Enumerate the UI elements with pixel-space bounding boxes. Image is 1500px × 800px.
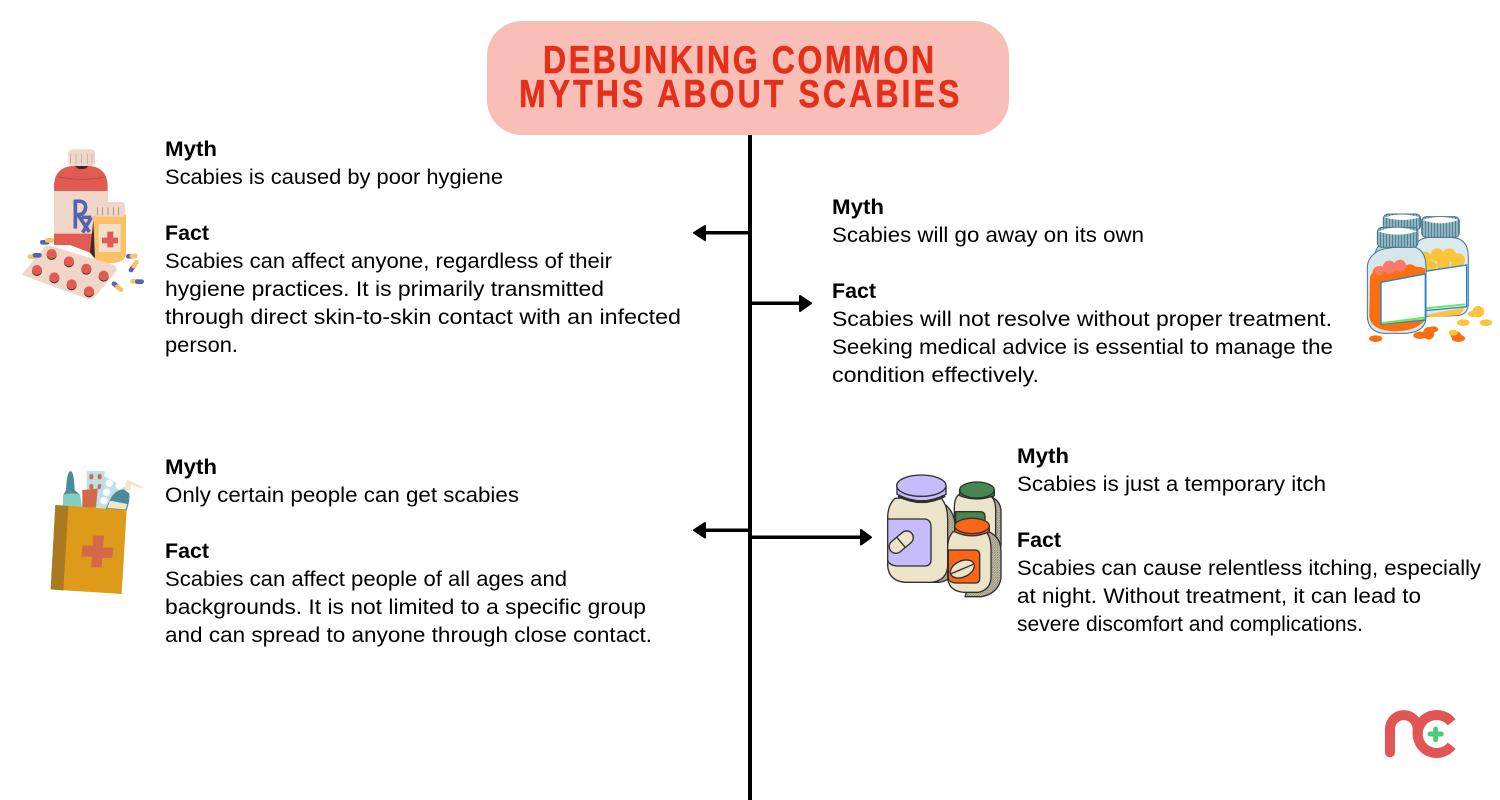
text block: go away on its own myth: Fact (832, 280, 876, 303)
text block: go away on its own myth: Scabies will not resolve without proper treatment. (832, 308, 1332, 331)
title banner (487, 21, 1009, 135)
text block: poor hygiene myth: Scabies is caused by poor hygiene (165, 166, 503, 189)
text block: certain people myth: Scabies can affect people of all ages and (165, 568, 567, 591)
text block: poor hygiene myth: Fact (165, 222, 209, 245)
text block: poor hygiene myth (165, 138, 681, 357)
text block: certain people myth: Fact (165, 540, 209, 563)
title banner: DEBUNKING COMMON (543, 38, 934, 82)
logo: NC medical mark (1390, 715, 1452, 753)
text block: temporary itch myth: at night. Without treatment, it can lead to (1017, 585, 1421, 608)
text block: certain people myth: backgrounds. It is not limited to a specific group (165, 596, 646, 619)
icon: illustrated supplement bottles (886, 475, 1001, 597)
icon: prescription bottle and blister pack (22, 149, 142, 299)
text block: go away on its own myth: condition effectively. (832, 364, 1039, 387)
text block: poor hygiene myth: hygiene practices. It is primarily transmitted (165, 278, 604, 301)
text block: go away on its own myth: Seeking medical advice is essential to manage the (832, 336, 1333, 359)
text block: poor hygiene myth: Scabies can affect anyone, regardless of their (165, 250, 612, 273)
icon: medical paper bag (51, 471, 144, 594)
arrow: bottom right (752, 530, 871, 544)
title banner: MYTHS ABOUT SCABIES (519, 72, 959, 116)
text block: certain people myth: Myth (165, 456, 217, 479)
central timeline (748, 135, 752, 800)
text block: temporary itch myth: Fact (1017, 529, 1061, 552)
text block: certain people myth (165, 456, 652, 647)
text block: temporary itch myth (1017, 445, 1482, 636)
text block: temporary itch myth: Scabies can cause relentless itching, especially (1017, 557, 1482, 580)
arrow: bottom left (694, 523, 748, 538)
text block: poor hygiene myth: person. (165, 334, 238, 357)
icon: medicine jars with pills (1367, 214, 1492, 342)
arrow: top left (694, 226, 748, 240)
text block: go away on its own myth: Scabies will go away on its own (832, 224, 1144, 247)
text block: temporary itch myth: severe discomfort and complications. (1017, 613, 1363, 636)
text block: poor hygiene myth: Myth (165, 138, 217, 161)
text block: certain people myth: and can spread to anyone through close contact. (165, 624, 652, 647)
text block: go away on its own myth: Myth (832, 196, 884, 219)
text block: poor hygiene myth: through direct skin-to-skin contact with an infected (165, 306, 681, 329)
text block: temporary itch myth: Myth (1017, 445, 1069, 468)
text block: certain people myth: Only certain people can get scabies (165, 484, 519, 507)
text block: temporary itch myth: Scabies is just a temporary itch (1017, 473, 1326, 496)
arrow: top right (752, 296, 811, 311)
text block: go away on its own myth (832, 196, 1333, 387)
